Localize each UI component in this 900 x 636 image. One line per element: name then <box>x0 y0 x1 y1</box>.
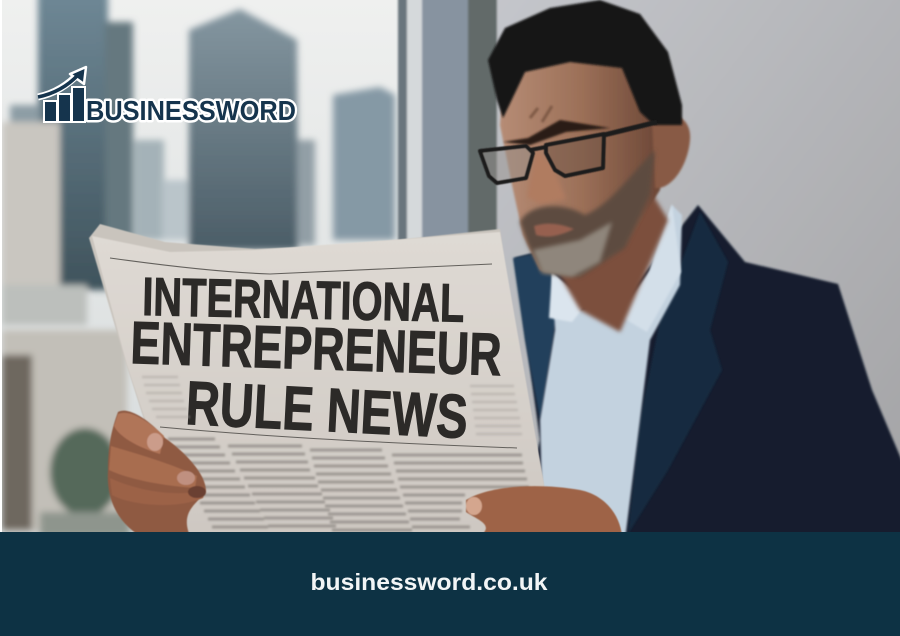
forehead wrinkles <box>530 106 552 122</box>
right hand holding the paper <box>466 486 622 536</box>
logo icon: bar chart with rising arrow <box>38 67 86 122</box>
shirt collar right <box>618 204 681 332</box>
beard chin grey <box>533 222 612 277</box>
headline text: INTERNATIONAL <box>142 267 465 334</box>
window frame and wall <box>398 0 900 536</box>
mouth <box>534 224 574 237</box>
beard <box>520 150 655 277</box>
left hand holding the paper <box>108 411 206 536</box>
jacket lapel <box>628 212 728 534</box>
newspaper <box>89 224 544 536</box>
jacket left shoulder <box>513 250 556 420</box>
body text columns <box>168 439 529 530</box>
paper sheet back <box>89 224 544 536</box>
headline text: ENTREPRENEUR <box>130 309 503 388</box>
logo: BUSINESSWORD <box>38 67 296 126</box>
footer bar <box>0 532 900 636</box>
footer website url: businessword.co.uk <box>310 569 548 595</box>
shirt collar left <box>549 272 588 322</box>
hair <box>488 0 682 125</box>
glasses <box>480 122 657 183</box>
logo wordmark: BUSINESSWORD <box>86 95 296 126</box>
lower rule <box>160 427 517 448</box>
paper sheet <box>92 232 544 536</box>
shirt <box>540 205 682 540</box>
nose <box>527 150 566 204</box>
man <box>480 0 900 545</box>
headline text: RULE NEWS <box>184 369 469 452</box>
header rule <box>110 258 492 274</box>
ear <box>652 114 690 188</box>
neck <box>548 190 668 332</box>
face <box>500 40 662 276</box>
suit jacket <box>515 205 900 545</box>
side text blocks beside headline <box>142 377 522 434</box>
city skyline seen through the window <box>0 0 400 537</box>
eyebrows <box>503 120 610 145</box>
headline text <box>130 267 503 452</box>
